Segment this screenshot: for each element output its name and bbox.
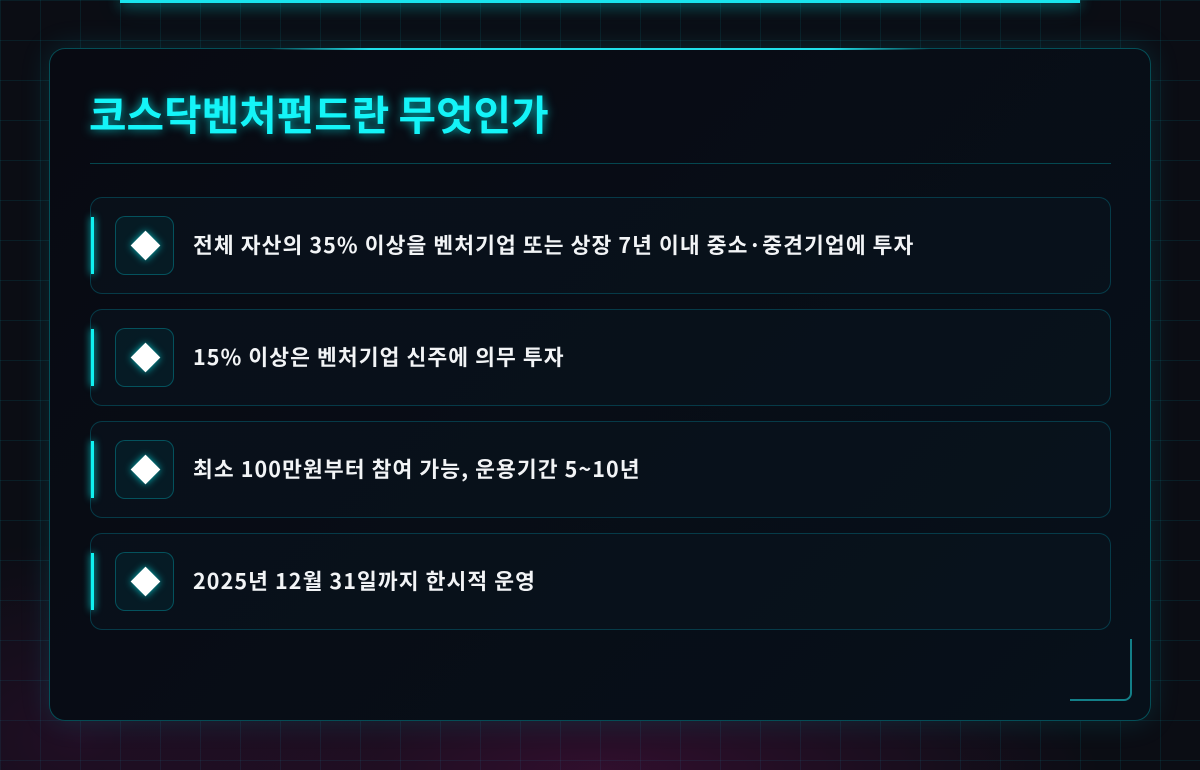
top glow bar	[120, 0, 1080, 3]
item 3: 최소 100만원부터 참여 가능, 운용기간 5~10년	[193, 453, 641, 484]
item 4: 2025년 12월 31일까지 한시적 운영	[193, 565, 536, 596]
corner bracket	[1070, 639, 1132, 701]
item 3	[90, 421, 1111, 518]
item 1	[90, 197, 1111, 294]
item 2	[90, 309, 1111, 406]
item 1: 전체 자산의 35% 이상을 벤처기업 또는 상장 7년 이내 중소·중견기업에 투자	[193, 229, 914, 260]
item 4	[90, 533, 1111, 630]
item 2: 15% 이상은 벤처기업 신주에 의무 투자	[193, 341, 565, 372]
title: 코스닥벤처펀드란 무엇인가	[89, 83, 549, 142]
